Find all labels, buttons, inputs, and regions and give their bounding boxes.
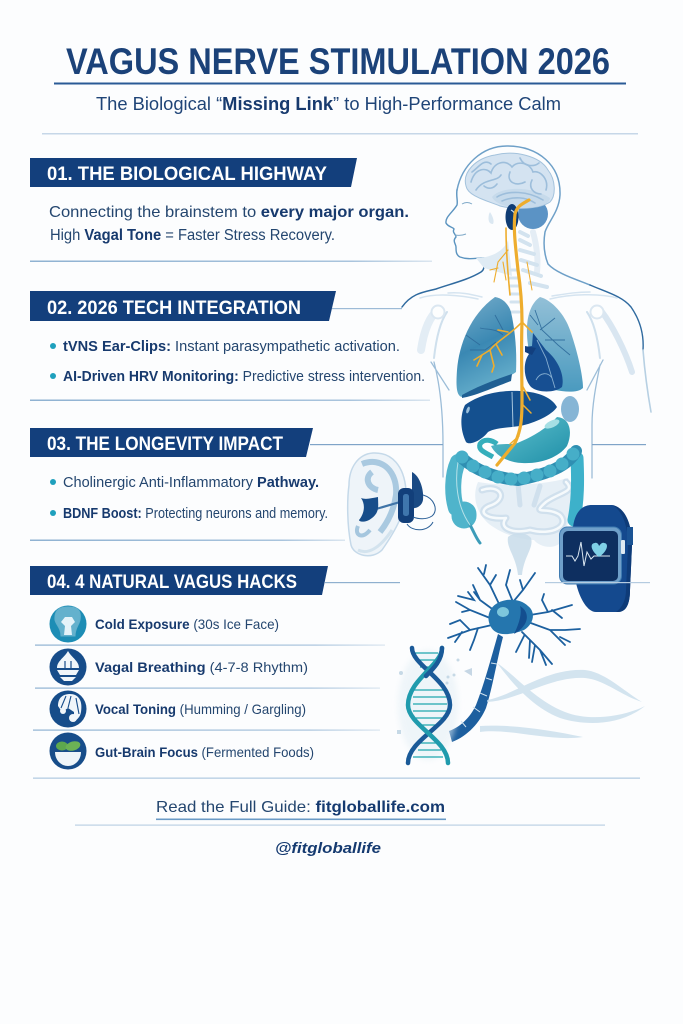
panel 03: longevity	[30, 428, 646, 541]
heading band 02	[30, 291, 336, 321]
panel 01: biological highway	[30, 158, 432, 262]
item: vocal toning: Vocal Toning (Humming / Gargling)	[95, 701, 306, 717]
call to action: Read the Full Guide: fitgloballife.com	[156, 799, 445, 816]
stomach-to-colon nerve end	[497, 452, 508, 465]
brain	[465, 153, 554, 208]
spine	[510, 232, 547, 312]
panel 02: tech integration	[30, 291, 430, 401]
small intestine	[475, 478, 571, 547]
item: vagal breathing: Vagal Breathing (4-7-8 Rhythm)	[95, 659, 308, 675]
heading band 03	[30, 428, 313, 457]
panel 04: natural hacks	[30, 566, 650, 770]
dna helix	[397, 648, 472, 763]
item: gut-brain: Gut-Brain Focus (Fermented Foods)	[95, 744, 314, 760]
icon: cold exposure	[50, 606, 86, 642]
text 01: Connecting the brainstem to every major organ.	[49, 204, 409, 221]
subtitle: The Biological “Missing Link” to High-Performance Calm	[96, 94, 561, 114]
item: cold exposure: Cold Exposure (30s Ice Face)	[95, 616, 279, 632]
liver	[461, 391, 557, 443]
ear-clip device illustration	[348, 453, 435, 556]
lower lung lobe shading	[462, 374, 512, 398]
stomach	[491, 417, 570, 463]
panel 04: natural hacks: 04. 4 NATURAL VAGUS HACKS	[47, 572, 297, 593]
intestines	[453, 448, 580, 575]
human anatomy figure	[402, 146, 651, 478]
social handle: @fitgloballife	[275, 840, 381, 857]
flowing ribbons	[480, 663, 645, 738]
heading band 01	[30, 158, 357, 187]
title: VAGUS NERVE STIMULATION 2026	[66, 41, 610, 82]
spleen	[561, 396, 579, 422]
vagus nerve	[474, 200, 532, 465]
body detail shading	[420, 292, 632, 372]
axon	[449, 634, 503, 742]
heart	[525, 333, 563, 392]
face details	[455, 202, 472, 235]
bullet tVNS	[50, 343, 56, 349]
panel 03: longevity: BDNF Boost: Protecting neurons and memory.	[63, 506, 328, 522]
icon: vocal toning	[50, 690, 86, 728]
ear on figure	[506, 204, 518, 230]
heading band 04	[30, 566, 328, 595]
ECG trace	[566, 542, 610, 566]
title rule	[54, 82, 626, 84]
panel 02: tech integration: AI-Driven HRV Monitoring: Predictive stress intervention.	[63, 369, 425, 385]
neuron	[448, 565, 580, 742]
bullet AI HRV	[50, 373, 56, 379]
heart on screen	[592, 543, 607, 557]
icon: vagal breathing	[50, 648, 86, 686]
bullet BDNF	[50, 510, 56, 516]
body outline	[402, 146, 651, 478]
icon: gut-brain bowl	[50, 732, 86, 770]
panel 02: tech integration: 02. 2026 TECH INTEGRATION	[47, 298, 301, 319]
bullet cholinergic	[50, 479, 56, 485]
panel 03: longevity: 03. THE LONGEVITY IMPACT	[47, 434, 283, 455]
panel 03: longevity: Cholinergic Anti-Inflammatory Pathway.	[63, 475, 319, 491]
smartwatch	[560, 505, 633, 612]
lungs	[457, 297, 516, 397]
cerebellum	[518, 199, 548, 229]
panel 01: biological highway: High Vagal Tone = Faster Stress Recovery.	[50, 227, 335, 244]
panel 02: tech integration: tVNS Ear-Clips: Instant parasympathetic activation.	[63, 339, 400, 355]
panel 01: biological highway: 01. THE BIOLOGICAL HIGHWAY	[47, 164, 327, 185]
colon segments	[456, 448, 580, 486]
large intestine	[453, 451, 578, 543]
bronchi	[466, 310, 570, 355]
